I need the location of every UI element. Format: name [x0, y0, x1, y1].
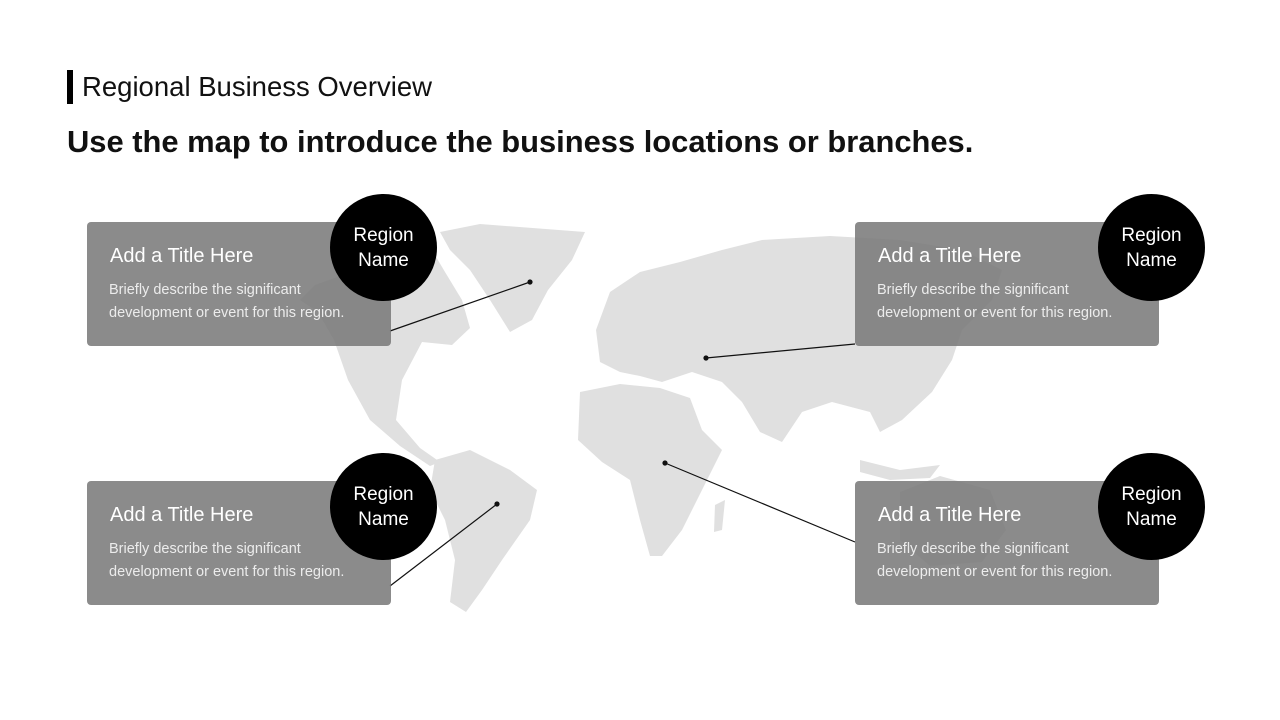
card: bottom right: Add a Title Here — [878, 504, 1021, 526]
card: top left — [87, 222, 391, 346]
card: top left: development or event for this region. — [109, 305, 344, 321]
region badge: bottom right: Region — [1121, 484, 1182, 504]
region badge: top right: Region — [1121, 224, 1182, 246]
region badge: top left — [330, 194, 437, 301]
card: bottom left: Briefly describe the significant — [109, 541, 301, 557]
region badge: top right — [1098, 194, 1205, 301]
card: top right: development or event for this region. — [877, 305, 1112, 321]
region badge: bottom left — [330, 453, 437, 560]
region badge: top left: Name — [358, 250, 409, 270]
card: bottom right: Briefly describe the significant — [877, 541, 1069, 557]
card: bottom right: development or event for this region. — [877, 564, 1112, 580]
region badge: bottom left: Region — [353, 484, 414, 504]
region badge: bottom left: Name — [358, 508, 409, 530]
card: top left: Add a Title Here — [110, 245, 253, 267]
card: top left: Briefly describe the significant — [109, 282, 301, 298]
region badge: top right: Name — [1126, 250, 1177, 270]
card: bottom left: Add a Title Here — [110, 504, 253, 526]
region badge: bottom right: Name — [1126, 508, 1177, 530]
card: bottom right — [855, 481, 1159, 605]
subtitle heading: Use the map to introduce the business locations or branches. — [67, 124, 973, 159]
card: top right: Add a Title Here — [878, 245, 1021, 267]
title bar accent — [67, 70, 73, 104]
card: top right: Briefly describe the significant — [877, 282, 1069, 298]
card: top right — [855, 222, 1159, 346]
region badge: top left: Region — [353, 224, 414, 246]
region badge: bottom right — [1098, 453, 1205, 560]
card: bottom left — [87, 481, 391, 605]
title: Regional Business Overview — [82, 71, 432, 102]
card: bottom left: development or event for this region. — [109, 564, 344, 580]
